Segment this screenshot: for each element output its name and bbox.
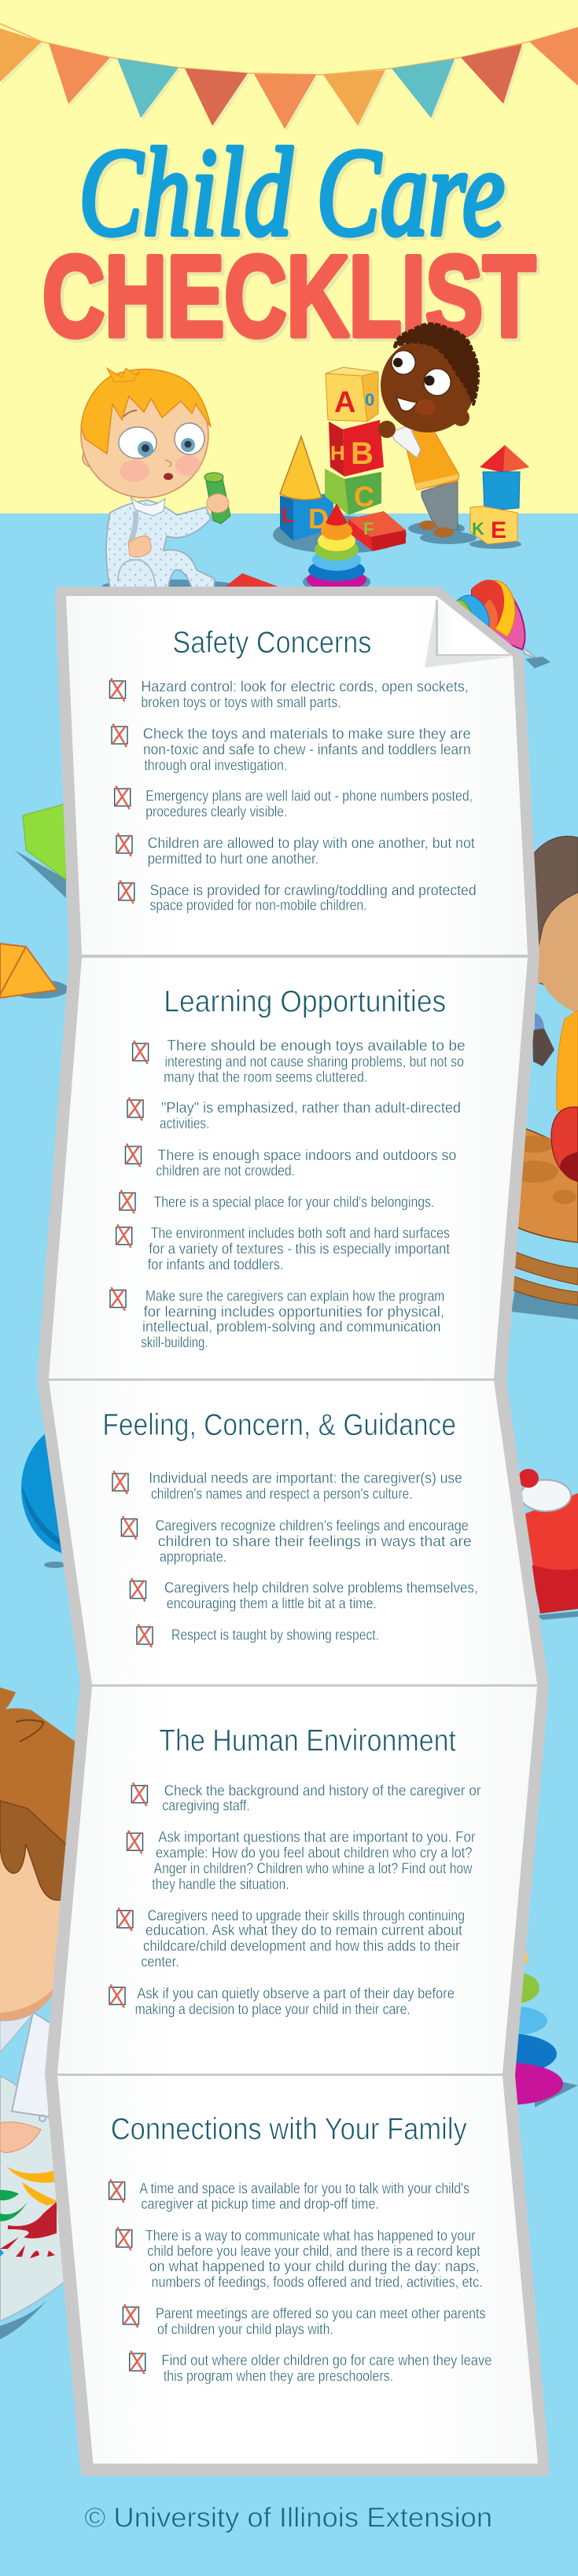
item: emergency plans [115,786,473,820]
item: check the toys: through oral investigation. [144,757,287,774]
illustration: spinning top toy [455,580,550,668]
item: recognize feelings: Caregivers recognize children's feelings and encourage [156,1518,469,1535]
panel: Learning Opportunities [49,958,528,1378]
item: important questions: they handle the situation. [152,1876,289,1893]
panel: Safety Concerns [66,596,528,955]
illustration: blue block with red roof and KE block: K [472,519,484,539]
item: caregivers explain: for learning includes opportunities for physical, [144,1304,444,1320]
background wall [0,0,578,513]
illustration: boy stacking blocks [378,324,478,544]
illustration: baby with green toy [81,368,236,592]
illustration: child on rocking horse at right [511,836,578,1319]
item: hazard control: Hazard control: look for electric cords, open sockets, [141,679,469,695]
bunting banner [0,24,578,131]
item: communicate: on what happened to your child during the day: naps, [149,2259,480,2276]
item: surfaces: The environment includes both soft and hard surfaces [151,1225,450,1242]
panel: Feeling, Concern, & Guidance [49,1381,537,1684]
item: special place: There is a special place for your child's belongings. [154,1194,434,1211]
item: individual needs [112,1470,462,1503]
item: surfaces [116,1224,451,1273]
item: background check: Check the background and history of the caregiver or [164,1783,481,1799]
illustration: blue block with red roof and KE block [469,445,529,549]
item: upgrade skills: center. [141,1954,179,1971]
illustration: blue block with red roof and KE block: E [491,517,506,543]
item: time and space: caregiver at pickup time and drop-off time. [141,2196,379,2213]
item: enough space: children are not crowded. [156,1163,295,1179]
item: caregivers explain: skill-building. [141,1334,208,1351]
page curl [425,599,513,668]
item: children play: Children are allowed to play with one another, but not [148,835,475,852]
item: children play: permitted to hurt one another. [148,851,318,867]
item: check the toys: non-toxic and safe to chew - infants and toddlers learn [143,742,471,758]
illustration: toy blocks stacked: F [363,519,374,539]
item: check the toys: Check the toys and materials to make sure they are [143,726,471,742]
illustration: toy blocks stacked: L [282,503,294,527]
item: older children: Find out where older children go for care when they leave [162,2353,491,2369]
heading: Safety Concerns [172,626,371,660]
item: parent meetings: of children your child plays with. [157,2321,333,2339]
illustration: toy blocks stacked: H [330,441,345,465]
item: surfaces: for infants and toddlers. [148,1257,283,1273]
item: enough toys: interesting and not cause sharing problems, but not so [165,1054,464,1071]
panel: Connections with Your Family [57,2076,538,2464]
heading: Feeling, Concern, & Guidance [102,1408,456,1442]
illustration: red block behind paper [223,573,280,588]
illustration: toy blocks stacked: A [334,386,355,419]
item: caregivers explain [110,1287,444,1351]
illustration: toy blocks stacked: D [308,502,329,535]
item: communicate: numbers of feedings, foods offered and tried, activities, etc. [151,2275,483,2291]
item: upgrade skills [117,1908,465,1971]
item: background check [131,1783,481,1814]
illustration: red toy at right [518,1469,578,1620]
item: solve problems: encouraging them a little bit at a time. [167,1595,377,1612]
illustration: orange triangle block at left [0,944,68,999]
item: communicate: child before you leave your child, and there is a record kept [147,2243,480,2260]
item: space provided [119,881,477,914]
item: check the toys [112,723,471,774]
heading: The Human Environment [159,1724,456,1758]
item: play emphasized [127,1098,461,1132]
item: play emphasized: "Play" is emphasized, rather than adult-directed [161,1100,461,1117]
title [42,122,536,360]
item: important questions: example: How do you feel about children who cry a lot? [156,1845,472,1861]
illustration: child at lower left [0,1687,94,2339]
paper panel outline [37,587,550,2476]
illustration: toy blocks stacked: B [351,436,374,471]
item: enough toys: There should be enough toys available to be [167,1038,466,1054]
item: quietly observe [109,1985,455,2018]
item: recognize feelings: appropriate. [160,1549,226,1566]
illustration: toy blocks stacked [273,367,407,554]
item: background check: caregiving staff. [162,1798,250,1814]
item: hazard control [110,678,469,711]
illustration: blue ball at left [21,1421,136,1568]
item: respect [137,1625,379,1647]
item: enough toys [133,1038,466,1086]
item: solve problems: Caregivers help children solve problems themselves, [164,1580,478,1596]
item: upgrade skills: education. Ask what they do to remain current about [145,1923,463,1939]
item: respect: Respect is taught by showing respect. [171,1627,379,1643]
illustration: stacking ring pyramid [303,503,370,593]
item: time and space [109,2180,469,2213]
item: time and space: A time and space is available for you to talk with your child's [139,2181,469,2197]
item: recognize feelings [121,1516,472,1566]
item: space provided: Space is provided for crawling/toddling and protected [149,882,477,899]
panel: The Human Environment [57,1687,537,2074]
item: communicate [116,2227,483,2291]
item: hazard control: broken toys or toys with small parts. [141,694,341,711]
item: quietly observe: Ask if you can quietly observe a part of their day before [137,1986,455,2003]
item: caregivers explain: intellectual, problem-solving and communication [142,1319,441,1335]
item: space provided: space provided for non-mobile children. [149,897,366,914]
item: solve problems [131,1578,478,1612]
item: recognize feelings: children to share their feelings in ways that are [158,1534,472,1551]
footer credit: © University of Illinois Extension [84,2502,492,2533]
item: older children [130,2351,491,2385]
item: parent meetings: Parent meetings are offered so you can meet other parents [156,2306,486,2323]
item: special place [120,1190,434,1213]
heading: Learning Opportunities [164,985,446,1019]
item: caregivers explain: Make sure the caregivers can explain how the program [145,1288,444,1305]
illustration: stacking rings at right [451,1950,578,2107]
item: older children: this program when they are preschoolers. [164,2368,393,2385]
illustration: green block at left [14,804,66,898]
item: important questions [127,1829,476,1893]
item: individual needs: Individual needs are important: the caregiver(s) use [149,1470,462,1487]
item: children play [116,834,475,867]
item: quietly observe: making a decision to place your child in their care. [135,2002,410,2018]
item: play emphasized: activities. [160,1116,209,1132]
item: parent meetings [123,2304,486,2339]
illustration: toy blocks stacked: C [354,480,374,513]
item: enough toys: many that the room seems cluttered. [164,1069,367,1086]
item: upgrade skills: Caregivers need to upgrade their skills through continuing [148,1908,465,1924]
item: surfaces: for a variety of textures - this is especially important [149,1241,451,1257]
illustration: toy blocks stacked: 0 [365,390,374,410]
heading: Connections with Your Family [111,2112,467,2146]
item: important questions: Ask important questions that are important to you. For [158,1829,476,1846]
item: individual needs: children's names and respect a person's culture. [151,1486,413,1503]
item: enough space: There is enough space indoors and outdoors so [157,1148,456,1165]
item: emergency plans: procedures clearly visible. [145,804,287,820]
item: emergency plans: Emergency plans are well laid out - phone numbers posted, [145,788,473,804]
item: communicate: There is a way to communicate what has happened to your [145,2228,476,2244]
item: upgrade skills: childcare/child development and how this adds to their [143,1938,460,1955]
item: important questions: Anger in children? Children who whine a lot? Find out how [154,1860,473,1877]
item: enough space [126,1143,456,1179]
